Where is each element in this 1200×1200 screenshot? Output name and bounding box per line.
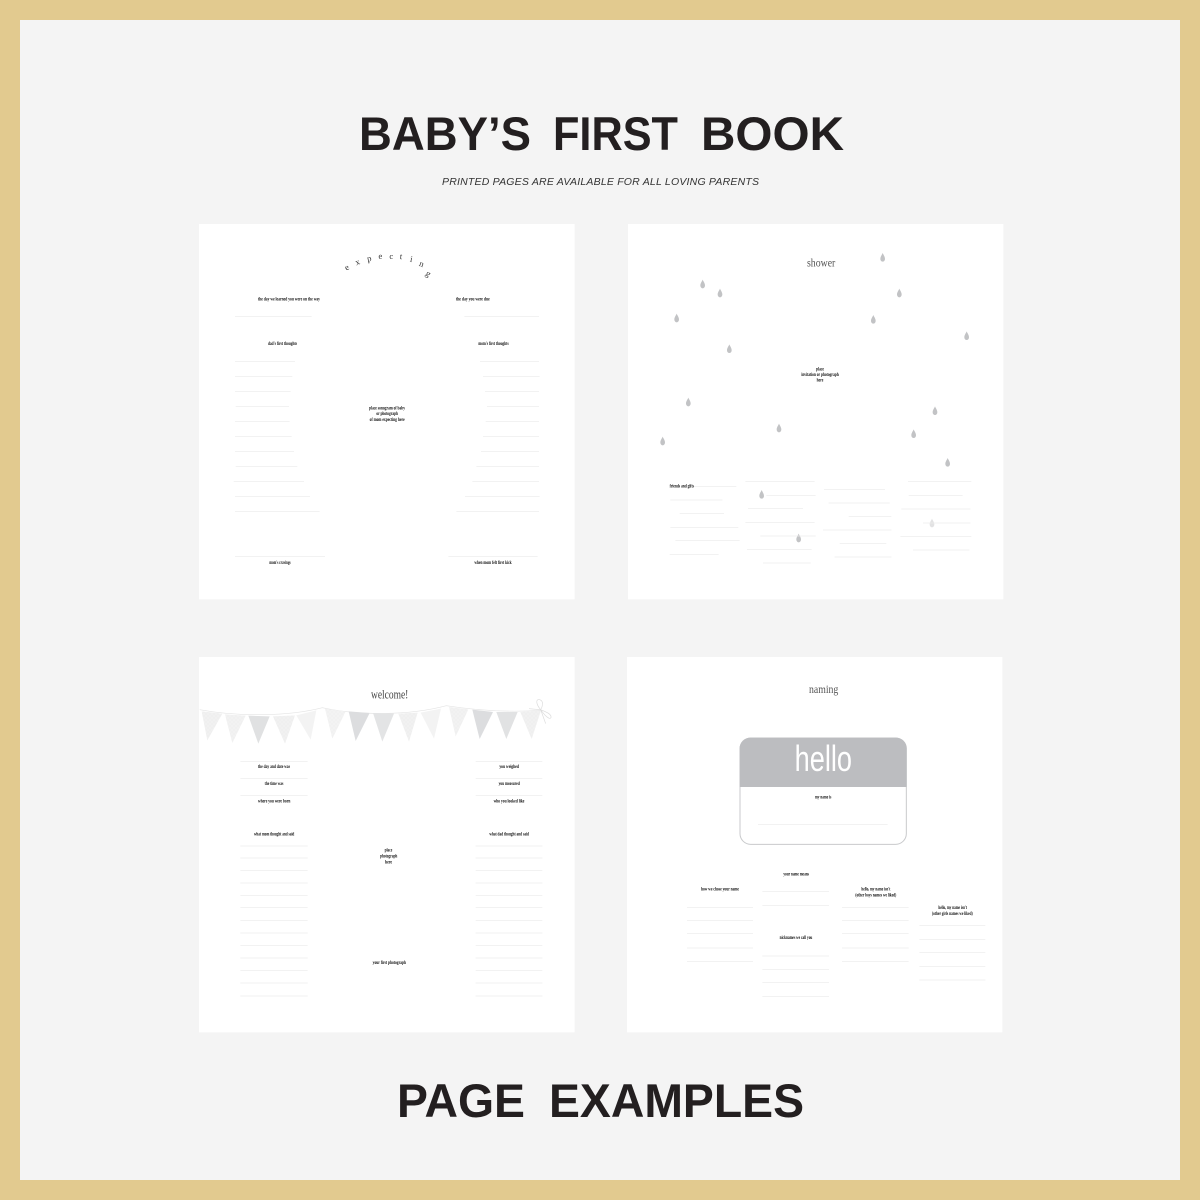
- photo placeholder text: place sonogram of baby: [369, 407, 405, 412]
- writing lines: four columns: [687, 891, 985, 996]
- labels: right column: you weighed: [499, 765, 519, 770]
- photo placeholder text: [801, 368, 839, 384]
- heading: welcome: welcome!: [371, 687, 408, 701]
- label: other boys names: [855, 888, 897, 899]
- labels: right column: who you looked like: [494, 799, 525, 804]
- labels: left column: where you were born: [258, 799, 290, 804]
- heading: expecting arc: expecting: [343, 251, 434, 279]
- photo placeholder text: [380, 848, 397, 865]
- writing lines: right column: [476, 761, 542, 996]
- labels: left column: [254, 765, 294, 838]
- label: other girls names: hello, my name isn't: [938, 906, 967, 911]
- bunting banner: [200, 700, 551, 744]
- caption: first photograph: your first photograph: [373, 961, 406, 966]
- subtitle: PRINTED PAGES ARE AVAILABLE FOR ALL LOVING PARENTS: [442, 176, 759, 188]
- writing lines: right column: [448, 316, 540, 556]
- label: other boys names: hello, my name isn't: [861, 888, 891, 893]
- photo placeholder text: or photograph: [376, 412, 398, 417]
- label: nicknames: nicknames we call you: [780, 936, 812, 941]
- label: day learned: the day we learned you were on the way: [258, 298, 320, 303]
- labels: left column: the time was: [265, 782, 283, 787]
- photo placeholder text: here: [385, 860, 393, 865]
- name tag card: [740, 738, 907, 844]
- panel: welcome page: [199, 657, 575, 1032]
- heading: shower: shower: [807, 256, 835, 270]
- label: my name is: my name is: [815, 796, 831, 801]
- footer heading: [397, 1074, 804, 1127]
- writing lines: left column: [234, 316, 325, 556]
- hello lettering: hello: [795, 738, 852, 779]
- photo placeholder text: photograph: [380, 854, 397, 859]
- label: other girls names: (other girls names we liked): [932, 912, 973, 917]
- labels: right column: what dad thought and said: [489, 833, 529, 838]
- label: first kick: when mom felt first kick: [474, 561, 512, 566]
- label: dad's thoughts: dad's first thoughts: [268, 342, 297, 347]
- labels: right column: you measured: [499, 782, 520, 787]
- label: your name means: your name means: [783, 872, 809, 877]
- icons: rain drops: [660, 253, 969, 542]
- photo placeholder text: [369, 407, 405, 423]
- labels: left column: what mom thought and said: [254, 833, 294, 838]
- writing lines: four columns: [670, 481, 971, 563]
- label: mom's thoughts: mom's first thoughts: [478, 342, 509, 347]
- labels: left column: the day and date was: [258, 765, 290, 770]
- panel: expecting page: [199, 224, 575, 599]
- label: other boys names: (other boys names we liked): [855, 894, 897, 899]
- label: friends and gifts: friends and gifts: [670, 485, 694, 490]
- footer heading: PAGE: [397, 1074, 525, 1127]
- photo placeholder text: here: [817, 379, 824, 384]
- title: FIRST: [553, 107, 678, 160]
- photo placeholder text: place: [385, 848, 393, 853]
- writing lines: left column: [240, 761, 308, 996]
- labels: right column: [489, 765, 529, 838]
- photo placeholder text: place: [816, 368, 825, 373]
- label: other girls names: [932, 906, 973, 917]
- title: BOOK: [701, 107, 844, 160]
- label: cravings: mom's cravings: [269, 561, 291, 566]
- footer heading: EXAMPLES: [549, 1074, 804, 1127]
- panel: shower page: [628, 224, 1003, 599]
- photo placeholder text: invitation or photograph: [801, 373, 839, 378]
- title: BABY’S: [359, 107, 531, 160]
- heading: naming: naming: [809, 684, 839, 696]
- photo placeholder text: of mom expecting here: [370, 418, 405, 423]
- panel: naming page: [627, 657, 1002, 1032]
- label: how we chose: how we chose your name: [701, 888, 740, 893]
- label: due date: the day you were due: [456, 298, 490, 303]
- title: [359, 107, 844, 160]
